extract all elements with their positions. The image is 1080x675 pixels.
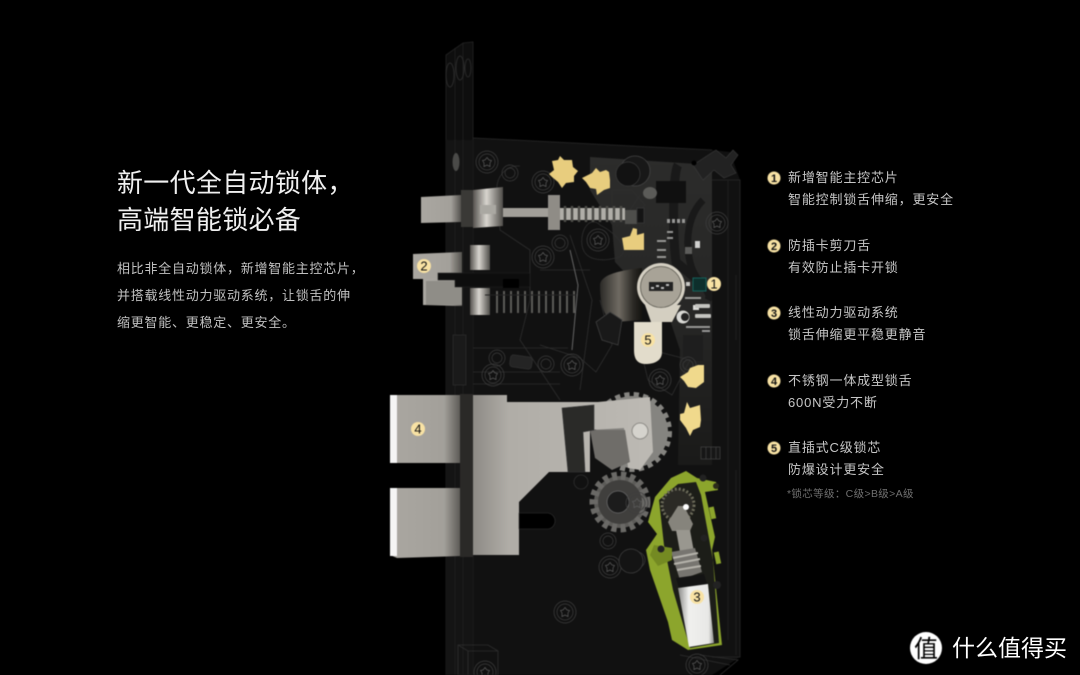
legend badge 3: 3	[771, 308, 777, 320]
screws	[474, 151, 728, 675]
feature 2 text: 防插卡剪刀舌	[788, 238, 871, 252]
gold contact chips	[549, 156, 704, 436]
feature 1 text: 新增智能主控芯片	[788, 170, 899, 185]
mechanical outlines	[458, 166, 738, 675]
feature 4 text	[788, 372, 912, 410]
green motor housing	[646, 471, 722, 650]
top bolt assembly	[421, 187, 644, 230]
icon: main control chip	[686, 278, 706, 291]
legend badge 2	[768, 240, 780, 253]
feature 2 text	[788, 238, 899, 275]
title	[117, 168, 354, 235]
anti-card lever	[570, 250, 578, 350]
badge: 1 on chip	[707, 276, 721, 292]
connector top right	[692, 150, 738, 180]
lock cylinder	[600, 263, 685, 364]
badge: 2 on bolt: 2	[420, 258, 428, 274]
dead bolts and stainless plate	[390, 394, 653, 558]
description text	[117, 261, 365, 330]
legend badge 2: 2	[771, 241, 777, 253]
panel: circuit board	[590, 157, 712, 465]
feature 3 text: 线性动力驱动系统	[788, 305, 899, 320]
badge: 5 on cylinder: 5	[644, 332, 652, 348]
connector small	[701, 447, 720, 459]
anti-card bolt assembly	[413, 245, 578, 315]
description text: 缩更智能、更稳定、更安全。	[117, 315, 296, 330]
footnote: *锁芯等级：C级>B级>A级	[787, 488, 914, 500]
badge: 4 on dead bolt	[411, 422, 425, 436]
badge: 4 on dead bolt: 4	[414, 422, 422, 436]
badge: 1 on chip: 1	[710, 276, 718, 292]
description text: 并搭载线性动力驱动系统，让锁舌的伸	[117, 288, 351, 303]
feature 5 text	[788, 440, 885, 477]
feature 5 text: 防爆设计更安全	[788, 462, 885, 477]
feature 5 text: 直插式C级锁芯	[788, 440, 881, 455]
feature 3 text: 锁舌伸缩更平稳更静音	[788, 327, 926, 342]
feature 3 text	[788, 305, 926, 342]
feature 2 text: 有效防止插卡开锁	[788, 260, 899, 275]
legend badge 5: 5	[771, 443, 777, 455]
badge: 2 on bolt	[417, 258, 431, 274]
panel: lock case	[446, 138, 740, 675]
legend badge 1	[768, 172, 780, 185]
watermark text: 什么值得买	[952, 635, 1067, 661]
description text: 相比非全自动锁体，新增智能主控芯片，	[117, 261, 365, 276]
legend badge 5	[768, 442, 780, 455]
legend badge 4: 4	[771, 376, 778, 388]
badge: 3 on motor: 3	[693, 590, 701, 604]
panel: faceplate	[446, 42, 473, 675]
feature 4 text: 不锈钢一体成型锁舌	[788, 372, 912, 388]
gears	[594, 396, 668, 528]
feature 1 text	[788, 170, 954, 207]
title: 新一代全自动锁体，	[117, 168, 354, 198]
legend badge 1: 1	[771, 173, 777, 185]
legend badge 3	[768, 306, 780, 320]
feature 1 text: 智能控制锁舌伸缩，更安全	[788, 192, 954, 207]
legend badge 4	[768, 374, 780, 388]
feature 4 text: 600N受力不断	[788, 395, 878, 410]
icon: watermark logo: 值	[914, 629, 938, 664]
badge: 5 on cylinder	[641, 332, 655, 348]
title: 高端智能锁必备	[117, 205, 301, 235]
lever link over cylinder	[596, 312, 622, 345]
badge: 3 on motor	[690, 590, 704, 604]
